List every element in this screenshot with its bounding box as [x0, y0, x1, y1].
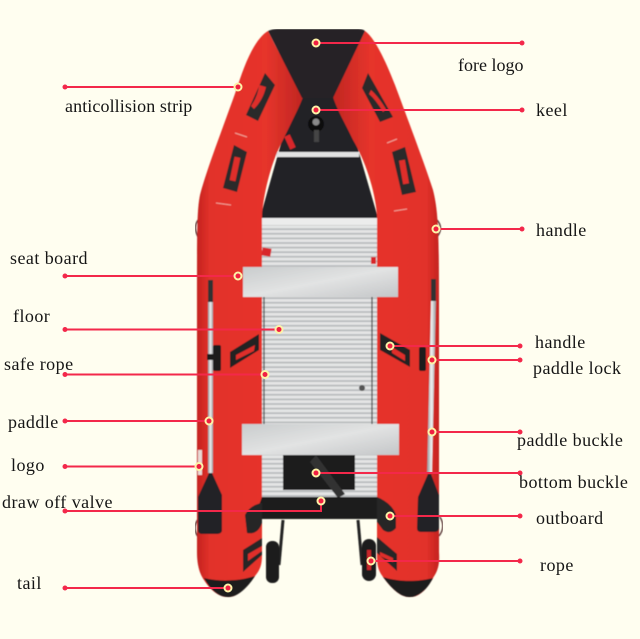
right tube — [333, 31, 439, 597]
label: rope: rope — [540, 555, 574, 575]
label: floor: floor — [13, 306, 50, 326]
label: seat board: seat board — [10, 248, 88, 268]
label: outboard: outboard — [536, 508, 604, 528]
seat boards — [243, 267, 398, 297]
boat illustration — [195, 29, 443, 597]
label: bottom buckle: bottom buckle — [519, 472, 628, 492]
label: logo: logo — [11, 455, 45, 475]
upper handles — [223, 73, 416, 195]
label: handle upper: handle — [536, 220, 587, 240]
bow deck strip — [276, 152, 359, 157]
wheel struts — [279, 520, 362, 565]
black bow panel — [268, 29, 365, 98]
label: handle lower: handle — [535, 332, 586, 352]
side ropes — [195, 220, 443, 537]
label: safe rope: safe rope — [4, 354, 74, 374]
label: keel: keel — [536, 100, 568, 120]
label: paddle: paddle — [8, 412, 59, 432]
label: paddle lock: paddle lock — [533, 358, 621, 378]
rear black patches — [243, 497, 397, 572]
label: fore logo: fore logo — [458, 55, 523, 75]
left tube — [197, 31, 303, 597]
label: tail: tail — [17, 573, 42, 593]
floor top band — [261, 218, 378, 225]
bow valve — [308, 116, 324, 132]
transom plate — [283, 455, 355, 490]
leader end dots — [62, 40, 524, 590]
leader lines — [65, 43, 522, 588]
lower handles — [230, 333, 410, 368]
label: draw off valve: draw off valve — [2, 492, 113, 512]
aluminium floor — [262, 218, 378, 508]
label: anticollision strip: anticollision strip — [65, 96, 192, 116]
tube logo — [198, 450, 202, 475]
tube seams — [216, 133, 407, 211]
inner deck — [260, 94, 378, 218]
transom bar — [254, 497, 388, 519]
deck buckles — [261, 134, 376, 264]
right paddle — [417, 279, 439, 532]
tail caps — [204, 576, 255, 597]
floor safe ropes — [264, 296, 372, 424]
floor drain — [359, 385, 365, 391]
label: paddle buckle: paddle buckle — [517, 430, 623, 450]
boat markers — [196, 40, 440, 592]
wheels — [266, 541, 279, 583]
left paddle — [198, 280, 222, 534]
